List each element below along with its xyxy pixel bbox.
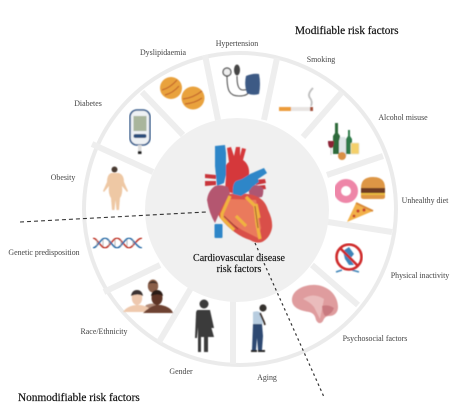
icon: glucose meter <box>130 110 150 154</box>
label: Diabetes: Diabetes <box>74 99 102 108</box>
label: Aging: Aging <box>257 373 277 382</box>
icon: blood pressure monitor <box>223 64 260 96</box>
section heading: modifiable risk factors: Modifiable risk factors <box>295 25 399 37</box>
label: Alcohol misuse: Alcohol misuse <box>378 113 428 122</box>
icon: elderly man <box>251 304 267 352</box>
section heading: nonmodifiable risk factors: Nonmodifiable risk factors <box>18 392 140 404</box>
icon: DNA helix <box>93 238 142 248</box>
heart sub-part: left atrium <box>207 185 230 223</box>
heart sub-part: superior vena cava <box>215 145 226 186</box>
icon: physical inactivity prohibition sign <box>336 244 362 272</box>
divider: modifiable boundary dashed line <box>255 243 324 397</box>
risk factor wheel <box>84 53 396 365</box>
heart sub-part: pulmonary artery <box>233 168 267 196</box>
label: Dyslipidaemia: Dyslipidaemia <box>140 48 187 57</box>
heart sub-part: aorta <box>225 147 249 195</box>
icon: unhealthy food <box>338 177 385 222</box>
label: Obesity: Obesity <box>51 173 75 182</box>
icon: anatomical heart <box>205 145 272 243</box>
divider: nonmodifiable boundary dashed line <box>20 212 206 222</box>
heart sub-part: atrium right <box>248 185 263 199</box>
label: Race/Ethnicity: Race/Ethnicity <box>81 327 127 336</box>
icon: obese figure <box>103 166 128 210</box>
label: Genetic predisposition: Genetic predisposition <box>8 248 80 257</box>
heart sub-part: front ventricle <box>223 199 261 238</box>
icon: cigarette <box>279 88 313 111</box>
heart sub-part: left pulmonary veins <box>205 174 216 186</box>
centre title <box>193 253 286 275</box>
centre title: Cardiovascular disease <box>193 253 286 264</box>
heart sub-part: ventricles <box>217 193 272 243</box>
label: Hypertension: Hypertension <box>216 39 258 48</box>
icon: three people of different ethnicities <box>123 280 173 313</box>
icon: dyslipidaemia fat balls <box>160 77 204 110</box>
label: Unhealthy diet: Unhealthy diet <box>402 196 449 205</box>
label: Psychosocial factors: Psychosocial factors <box>343 334 407 343</box>
heart sub-part: inferior vena cava <box>214 224 222 238</box>
icon: alcohol bottles <box>328 123 359 160</box>
heart sub-part: coronary vessels <box>222 196 260 239</box>
icon: brain <box>292 285 338 323</box>
icon: gender symbol <box>195 300 214 352</box>
label: Smoking: Smoking <box>307 55 335 64</box>
label: Physical inactivity: Physical inactivity <box>391 271 449 280</box>
centre title: risk factors <box>217 264 261 275</box>
heart sub-part: right pulmonary veins <box>254 179 266 190</box>
label: Gender: Gender <box>169 367 193 376</box>
